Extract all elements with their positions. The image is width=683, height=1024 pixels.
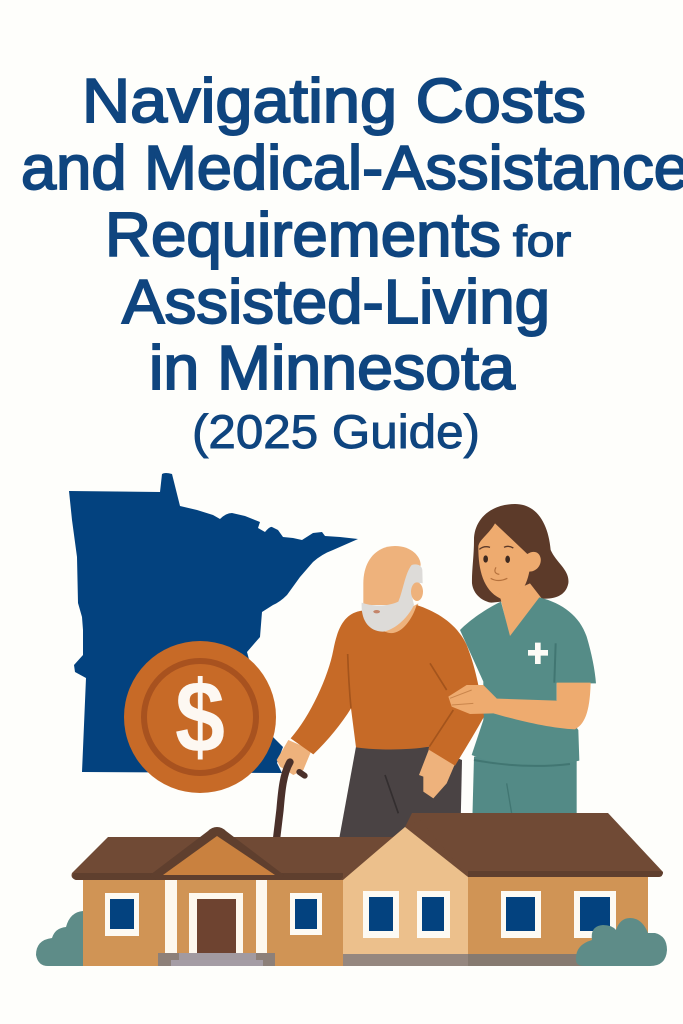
right wing wall bbox=[468, 877, 648, 966]
title: Assisted-Living bbox=[122, 268, 550, 337]
title: Requirements bbox=[105, 201, 501, 270]
icon: dollar coin: $ bbox=[175, 660, 225, 774]
man sweater bbox=[291, 605, 484, 766]
nurse hand on arm bbox=[448, 685, 497, 714]
map of Minnesota bbox=[69, 473, 358, 773]
right bush bbox=[576, 918, 667, 966]
nurse face bbox=[478, 523, 541, 600]
icon: medical cross bbox=[528, 643, 548, 664]
left bush bbox=[36, 911, 83, 966]
stone base bbox=[343, 954, 593, 966]
gable bbox=[150, 827, 284, 880]
title: for bbox=[513, 217, 571, 266]
illustration: elderly man bbox=[276, 546, 484, 843]
left roof bbox=[72, 837, 400, 880]
right windows bbox=[363, 891, 616, 938]
man head bbox=[363, 546, 421, 605]
nurse neck bbox=[500, 583, 542, 638]
porch columns bbox=[165, 880, 267, 954]
man hands bbox=[419, 747, 457, 798]
cane bbox=[276, 762, 290, 843]
title: in Minnesota bbox=[149, 334, 516, 403]
title bbox=[21, 67, 683, 458]
icon: dollar coin bbox=[124, 641, 276, 793]
left wing wall bbox=[83, 880, 343, 966]
man neck bbox=[385, 603, 418, 638]
title: (2025 Guide) bbox=[192, 405, 480, 458]
nurse hair bbox=[472, 504, 568, 603]
cream gable wall bbox=[343, 827, 468, 966]
man trousers bbox=[338, 747, 462, 843]
man ear bbox=[411, 582, 423, 601]
left windows bbox=[105, 893, 322, 936]
nurse scrub top bbox=[460, 597, 596, 766]
nurse arm bbox=[490, 683, 591, 729]
right roof bbox=[405, 813, 663, 877]
title: Navigating Costs bbox=[82, 67, 586, 136]
title: and Medical-Assistance bbox=[21, 134, 683, 203]
illustration: nurse bbox=[460, 504, 596, 820]
porch steps bbox=[158, 953, 275, 966]
nurse pants bbox=[472, 757, 577, 820]
illustration: assisted-living house bbox=[36, 813, 667, 966]
man beard and hair bbox=[362, 564, 423, 632]
front door bbox=[189, 893, 243, 954]
